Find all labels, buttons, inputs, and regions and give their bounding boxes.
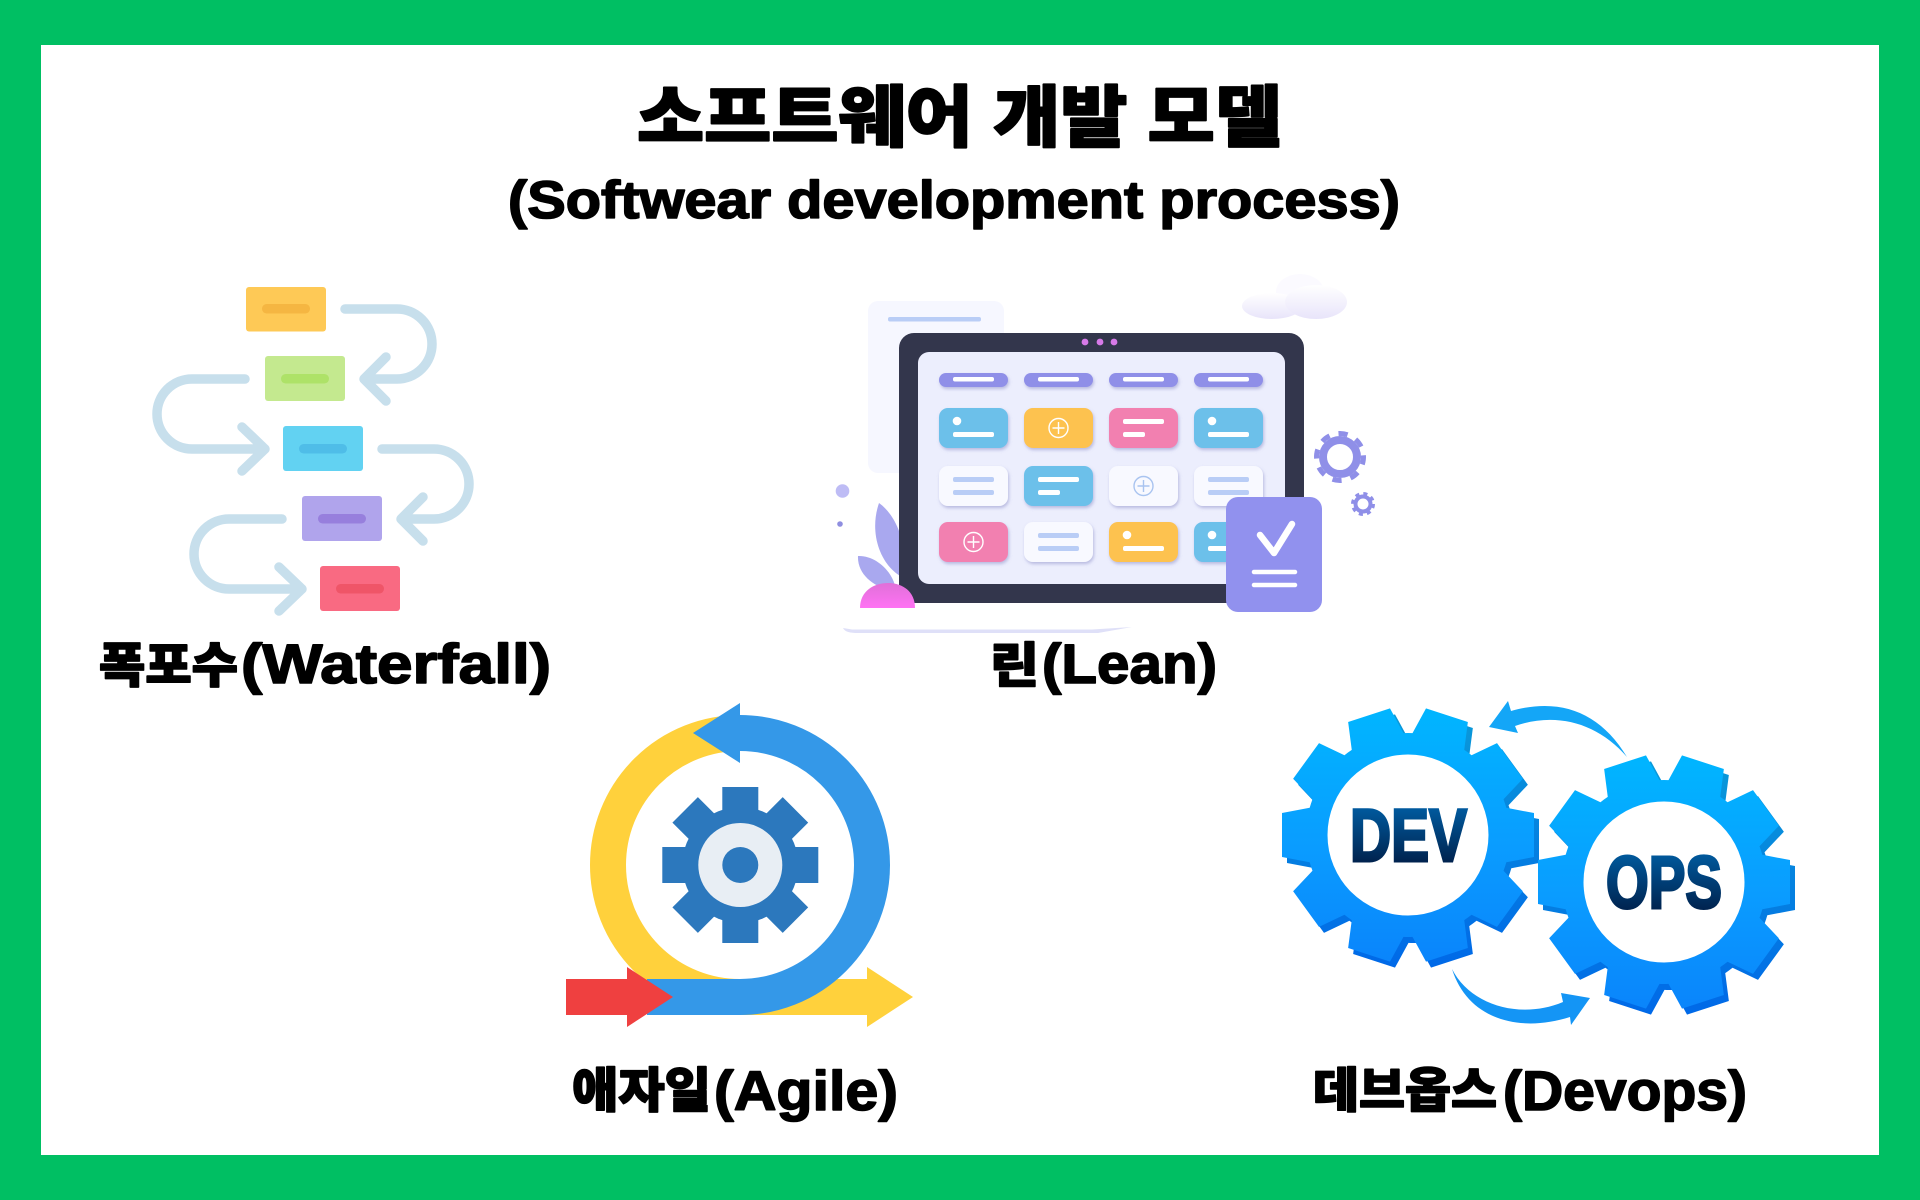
blue arrow bbox=[647, 703, 872, 997]
tablet body bbox=[899, 333, 1304, 603]
yellow arrow bbox=[608, 733, 913, 1027]
tablet screen bbox=[918, 352, 1285, 584]
title: 소프트웨어 개발 모델 bbox=[637, 81, 1282, 156]
label: devops: 데브옵스 bbox=[1313, 1065, 1497, 1118]
ops gear bbox=[1534, 752, 1799, 1018]
checklist card bbox=[1226, 497, 1322, 612]
icon: waterfall flow bbox=[157, 287, 469, 611]
label: devops bbox=[1313, 1059, 1747, 1122]
cloud bbox=[1242, 274, 1347, 319]
label: waterfall: 폭포수 bbox=[99, 640, 238, 693]
row 1 cards bbox=[939, 408, 1263, 448]
subtitle: (Softwear development process) bbox=[508, 171, 1400, 230]
icon: devops gears bbox=[1278, 701, 1799, 1025]
text: OPS: OPS bbox=[1606, 841, 1722, 924]
gear bbox=[662, 787, 818, 943]
dev gear bbox=[1278, 705, 1543, 971]
bottom cycle arrow bbox=[1452, 969, 1590, 1025]
leaves bbox=[858, 503, 905, 590]
top cycle arrow bbox=[1489, 701, 1627, 757]
back paper bbox=[868, 301, 1004, 473]
floor bbox=[843, 627, 1132, 633]
row 3 cards bbox=[939, 522, 1263, 562]
row 2 cards bbox=[939, 466, 1263, 506]
icon: agile loop bbox=[566, 703, 913, 1027]
text: DEV: DEV bbox=[1350, 794, 1467, 877]
label: devops: (Devops) bbox=[1503, 1059, 1747, 1122]
label: agile: (Agile) bbox=[714, 1059, 898, 1122]
small cog bbox=[1352, 494, 1374, 514]
pink dome bbox=[860, 583, 915, 608]
floating dots bbox=[836, 484, 849, 527]
label: lean: 린 bbox=[990, 640, 1039, 693]
column headers bbox=[939, 373, 1263, 387]
label: lean: (Lean) bbox=[1042, 632, 1217, 695]
camera dots bbox=[1082, 339, 1117, 345]
label: waterfall: (Waterfall) bbox=[241, 632, 551, 695]
label: agile bbox=[572, 1059, 898, 1122]
large cog bbox=[1315, 432, 1365, 482]
label: waterfall bbox=[99, 632, 551, 695]
icon: lean kanban tablet bbox=[836, 274, 1374, 633]
red arrow bbox=[566, 967, 673, 1027]
label: agile: 애자일 bbox=[572, 1065, 711, 1118]
